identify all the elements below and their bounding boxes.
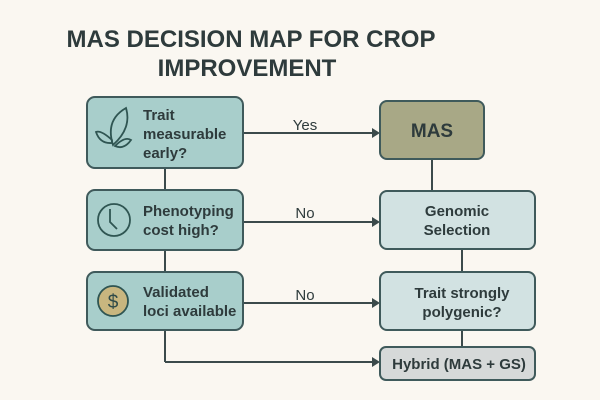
box: phenotyping cost high [87, 190, 243, 250]
box: trait measurable early: Trait [143, 107, 175, 124]
arrow: no to trait polygenic: No [295, 287, 315, 304]
arrow: no to genomic selection: No [295, 205, 315, 222]
box: trait strongly polygenic [380, 272, 535, 330]
title [67, 26, 435, 82]
title: MAS DECISION MAP FOR CROP [67, 26, 435, 53]
icon: coin: $ [108, 292, 119, 313]
box: trait measurable early: early? [143, 145, 187, 162]
arrow: no to trait polygenic [243, 287, 380, 308]
box: genomic selection [380, 191, 535, 249]
box: genomic selection: Genomic [425, 203, 489, 220]
box: trait measurable early: measurable [143, 126, 226, 143]
box: trait measurable early [87, 97, 243, 168]
box: MAS [380, 101, 484, 159]
arrow: to hybrid [372, 357, 380, 367]
box: phenotyping cost high: cost high? [143, 222, 219, 239]
box: validated loci [87, 272, 243, 330]
box: MAS: MAS [411, 121, 453, 142]
box: trait strongly polygenic: polygenic? [422, 304, 502, 321]
box: genomic selection: Selection [424, 222, 490, 239]
arrow: no to genomic selection [243, 205, 380, 227]
icon: clock [98, 204, 130, 236]
box: hybrid [380, 347, 535, 380]
arrow: yes to MAS: Yes [293, 117, 317, 134]
icon: coin [98, 286, 128, 316]
icon: leaves [96, 108, 131, 147]
box: validated loci: loci available [143, 303, 236, 320]
box: hybrid: Hybrid (MAS + GS) [392, 356, 526, 373]
title: IMPROVEMENT [158, 55, 337, 82]
arrow: yes to MAS [243, 117, 380, 138]
box: phenotyping cost high: Phenotyping [143, 203, 234, 220]
box: trait strongly polygenic: Trait strongly [414, 285, 510, 302]
box: validated loci: Validated [143, 284, 209, 301]
